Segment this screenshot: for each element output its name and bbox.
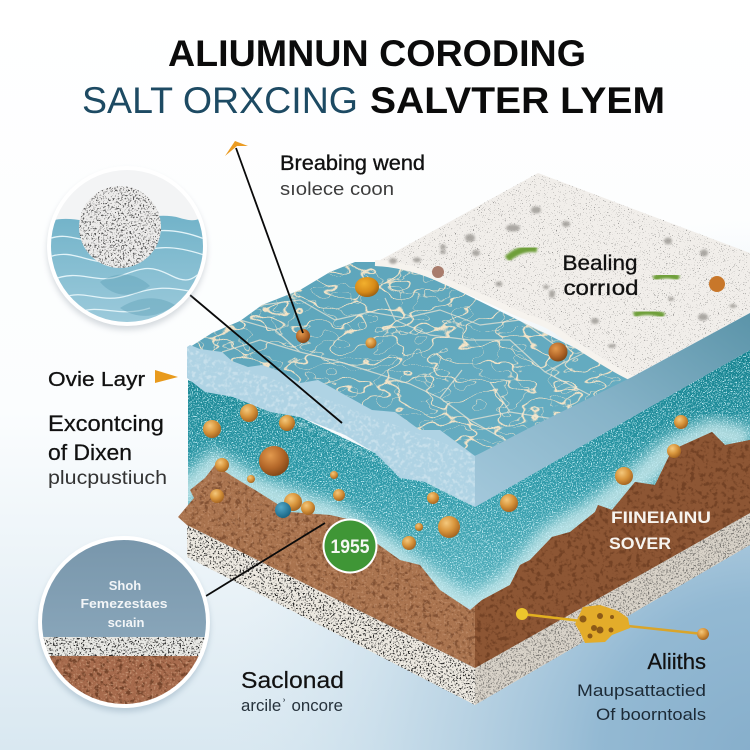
label: saclonad: arcileʾ oncore: [241, 696, 343, 715]
green moss tufts: [507, 249, 679, 316]
yellow aluminium cluster callout: [516, 605, 709, 643]
magnifier text: Shoh: [109, 578, 141, 593]
arrow head: orange: [225, 141, 248, 156]
label: ovie layer: [48, 369, 178, 391]
label: excontcing of dixen: Excontcing: [48, 411, 164, 436]
label: bealing corrod: [562, 252, 638, 300]
badge: 1955: [322, 518, 378, 574]
label: breaking wind: sıolece coon: [280, 179, 394, 199]
label: saclonad: [241, 667, 344, 715]
label: breaking wind: [280, 152, 425, 199]
title: [82, 33, 665, 121]
title: SALVTER LYEM: [370, 80, 665, 121]
label: aliiths: Aliiths: [647, 649, 706, 674]
label: fiineiainu sover: [609, 508, 711, 553]
brown soil layer: [178, 432, 750, 668]
sand pits: [389, 206, 736, 348]
magnifier: sphere on water: [47, 166, 207, 330]
label: breaking wind: Breabing wend: [280, 152, 425, 175]
label: saclonad: Saclonad: [241, 667, 344, 693]
connector lines: [190, 148, 342, 596]
title: SALT ORXCING: [82, 80, 358, 121]
layered block diagram: [178, 172, 750, 705]
water crack lines: [222, 298, 590, 440]
label: excontcing of dixen: plucpustiuch: [48, 468, 167, 489]
label: aliiths: [577, 649, 706, 724]
water surface: [188, 258, 643, 458]
label: fiineiainu sover: FIINEIAINU: [611, 508, 711, 527]
magnifier text: [80, 578, 168, 630]
ice layer: [187, 313, 750, 510]
label: excontcing of dixen: of Dixen: [48, 440, 132, 465]
icon: orange pointer: [155, 370, 178, 383]
label: aliiths: Maupsattactied: [577, 681, 706, 700]
label: bealing corrod: corrıod: [564, 277, 638, 300]
floating balls: [203, 266, 725, 550]
label: excontcing of dixen: [48, 411, 167, 489]
magnifier text: scıain: [108, 615, 144, 630]
magnifier text: Femezestaes: [80, 597, 168, 611]
label: aliiths: Of boorntoals: [596, 705, 706, 724]
gravel base layer: [187, 513, 750, 705]
teal porous layer: [178, 350, 750, 610]
badge: 1955: 1955: [330, 537, 370, 558]
sand top layer: [375, 172, 750, 378]
title: ALIUMNUN CORODING: [168, 33, 586, 74]
label: bealing corrod: Bealing: [562, 252, 638, 275]
label: fiineiainu sover: SOVER: [609, 534, 671, 553]
magnifier: layer detail: [38, 536, 210, 712]
label: ovie layer: Ovie Layr: [48, 369, 145, 391]
